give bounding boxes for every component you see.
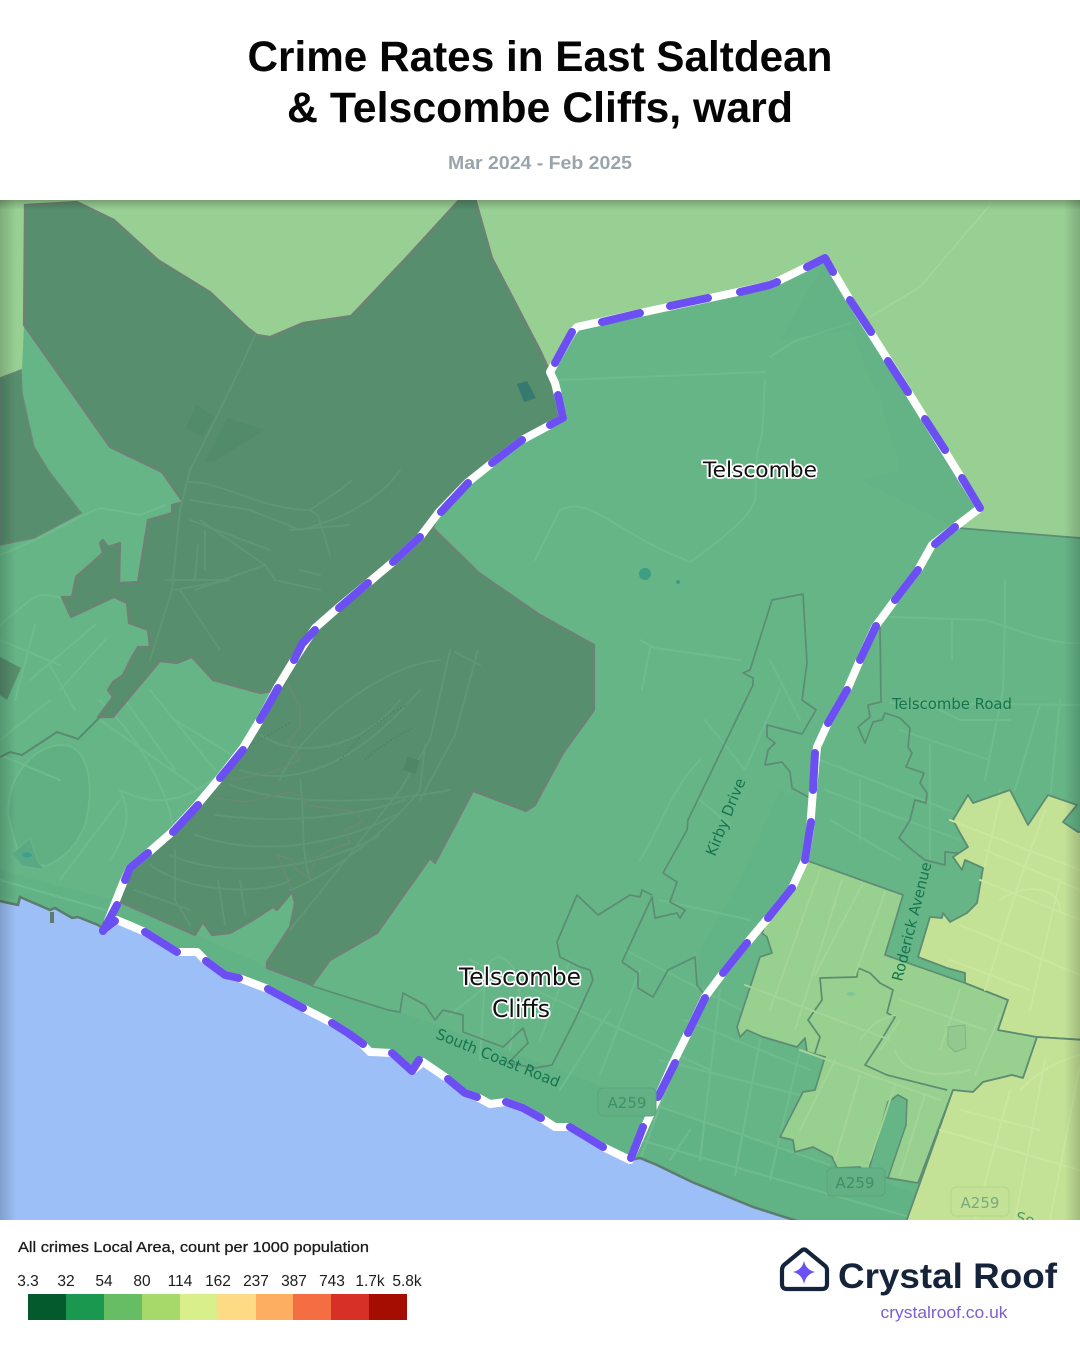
icon: house with star: [782, 1250, 827, 1289]
legend: [17, 1239, 422, 1320]
road label: Kirby Drive: Kirby Drive: [702, 776, 749, 858]
pier: [50, 912, 54, 923]
sea: [0, 897, 800, 1225]
legend colour bar: [28, 1294, 407, 1320]
date range subtitle: Mar 2024 - Feb 2025: [448, 153, 632, 173]
roads on medium green: [0, 323, 1080, 1220]
water features in Telscombe: [639, 568, 680, 584]
road label: Telscombe Road: Telscombe Road: [891, 695, 1012, 713]
place label: Telscombe Cliffs: Telscombe: [458, 963, 581, 991]
road shield: A259 west: A259: [608, 1094, 646, 1112]
legend scale values: 32: [57, 1273, 75, 1290]
faint parcel outlines in dark: [215, 683, 362, 890]
legend scale values: 387: [281, 1273, 307, 1290]
white boundary line: [103, 258, 980, 1160]
legend scale values: 743: [319, 1273, 345, 1290]
legend scale values: 3.3: [17, 1273, 39, 1290]
legend scale values: 80: [133, 1273, 151, 1290]
far-left small dark patch: [0, 657, 21, 700]
faint track in light green: [870, 205, 990, 317]
darker fields in dark polygon: [186, 405, 265, 462]
west boundary line: [0, 717, 100, 757]
road label: South Coast Road: South Coast Road: [434, 1025, 563, 1091]
legend scale values: 237: [243, 1273, 269, 1290]
Telscombe north-east shading: [780, 262, 975, 525]
teal pond: [517, 381, 536, 402]
legend scale values: [17, 1273, 422, 1290]
road shield: A259 west: [598, 1088, 656, 1116]
roads on light parcels: [745, 870, 1000, 1175]
legend title: All crimes Local Area, count per 1000 population: [18, 1239, 369, 1256]
road label fragment: So: [1014, 1208, 1036, 1230]
title: [248, 33, 832, 132]
park oval: [8, 745, 90, 866]
central parcel outline: [808, 968, 947, 1090]
yellow-green parcel north-east: [918, 790, 1080, 1040]
logo: Crystal Roof: [782, 1250, 1057, 1322]
Telscombe Cliffs parcel outlines: [312, 528, 1080, 1068]
far-left dark area: [0, 370, 81, 545]
coastal strip shading: [0, 870, 1000, 1220]
road shield: A259 east: A259: [961, 1194, 999, 1212]
legend scale values: 162: [205, 1273, 231, 1290]
place label: Telscombe Cliffs: Cliffs: [492, 995, 550, 1023]
website url: crystalroof.co.uk: [880, 1304, 1008, 1322]
dark green low-crime polygon: [24, 198, 594, 985]
road label: Roderick Avenue: Roderick Avenue: [888, 860, 935, 983]
place label: Telscombe: Telscombe: [702, 458, 817, 483]
pond in park: [13, 838, 43, 869]
narrow medium strip: [868, 1095, 907, 1178]
Kirby Drive darker scrub: [697, 790, 808, 985]
purple dashes: [103, 258, 980, 1158]
small square: [410, 760, 419, 772]
legend scale values: 114: [168, 1273, 193, 1290]
road shield: A259 east: [951, 1187, 1009, 1216]
roads on dark green: [180, 334, 292, 930]
map panel: [0, 198, 1080, 1230]
legend scale values: 5.8k: [392, 1273, 422, 1290]
yellow-green parcel south-east: [905, 1037, 1080, 1225]
road shield: A259 centre: A259: [836, 1174, 874, 1192]
choropleth area: light green base: [0, 200, 1080, 538]
wordmark: Crystal Roof: [838, 1257, 1057, 1296]
choropleth area: medium green: [0, 258, 1080, 1220]
ward boundary: [103, 258, 980, 1160]
map edge vignette: [0, 200, 1080, 1220]
title: & Telscombe Cliffs, ward: [287, 84, 793, 132]
road shield: A259 centre: [827, 1168, 885, 1196]
place label: Telscombe Cliffs: [458, 963, 581, 1023]
light green parcel south-east: [737, 861, 1037, 1183]
hillside dotted marks: [250, 705, 412, 760]
pocket pond: [948, 1025, 966, 1052]
title: Crime Rates in East Saltdean: [248, 33, 832, 81]
legend scale values: 54: [95, 1273, 113, 1290]
legend scale values: 1.7k: [355, 1273, 385, 1290]
